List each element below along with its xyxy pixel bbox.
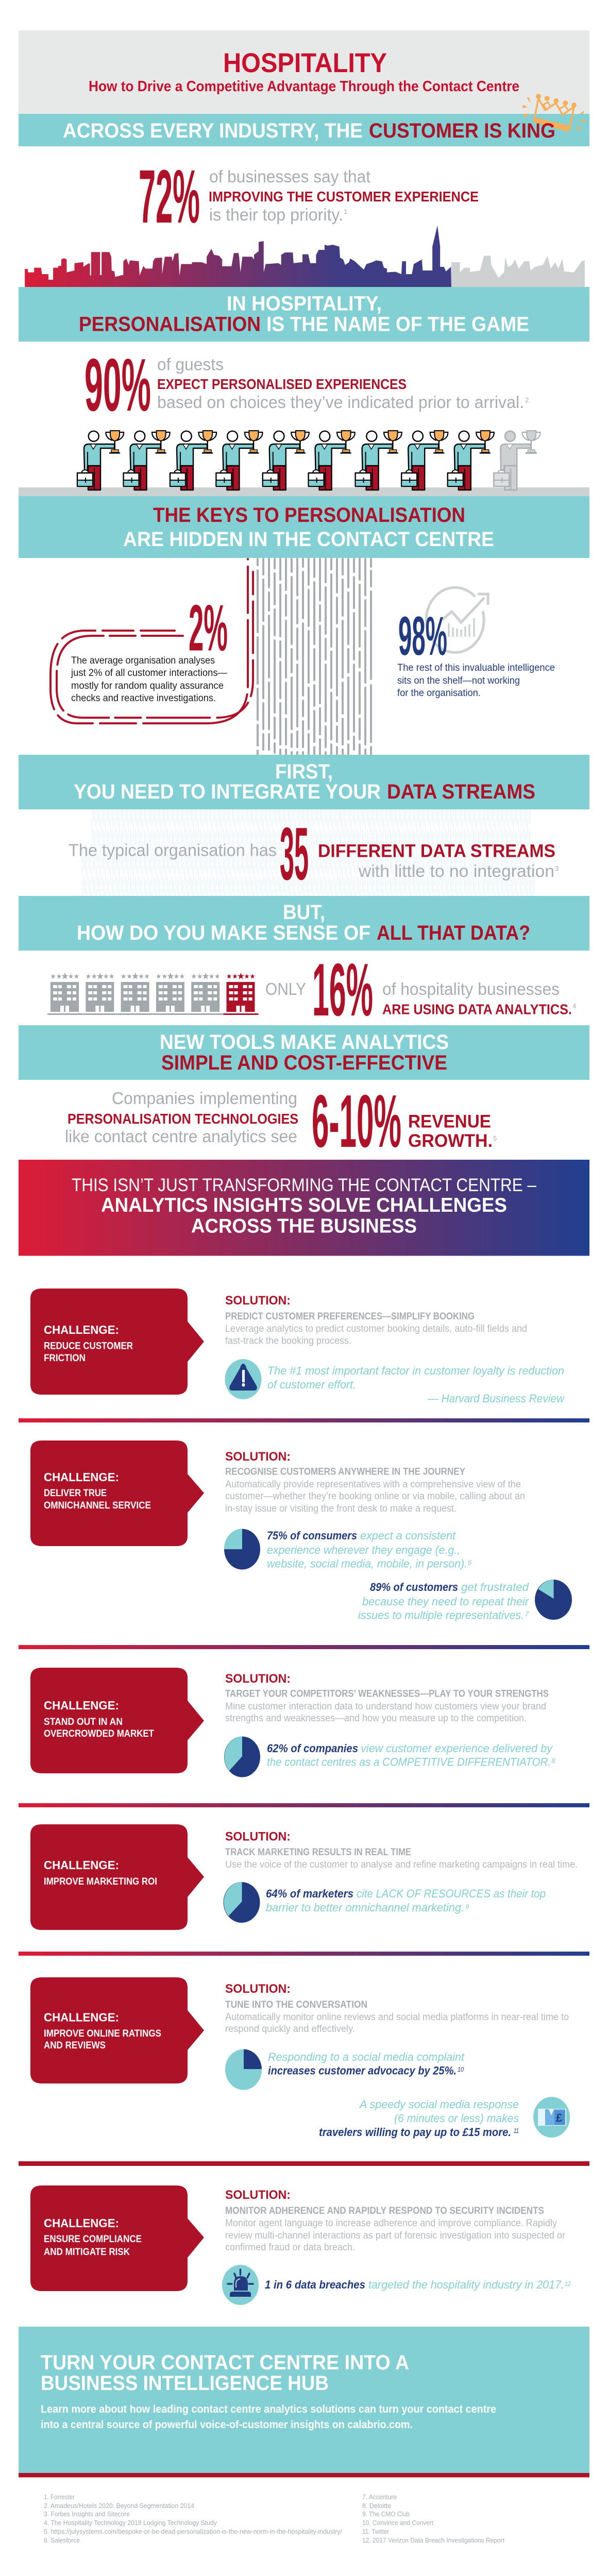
- pie chart: 62 percent: [224, 1736, 260, 1777]
- gradient banner: ANALYTICS INSIGHTS SOLVE CHALLENGES: [101, 1194, 507, 1216]
- panel: call to action: BUSINESS INTELLIGENCE HUB: [41, 2372, 329, 2395]
- stat: data breaches: 1 in 6 data breaches: [265, 2278, 365, 2291]
- quote: [267, 1364, 565, 1405]
- stat: 75 percent of consumers: expect a consistent: [360, 1529, 456, 1542]
- heading band: keys to personalisation: ARE HIDDEN IN THE CONTACT CENTRE: [123, 528, 494, 551]
- heading band: keys to personalisation: [19, 496, 589, 558]
- stat: 98 percent: sits on the shelf—not working: [397, 675, 520, 686]
- gradient banner: [19, 1160, 589, 1256]
- skyline illustration: [25, 225, 585, 288]
- stat: 64 percent of marketers: cite LACK OF RESOURCES as their top: [357, 1887, 546, 1900]
- gradient banner: THIS ISN’T JUST TRANSFORMING THE CONTACT CENTRE –: [72, 1175, 536, 1195]
- stat: 16 percent: ARE USING DATA ANALYTICS.: [382, 1002, 572, 1018]
- heading band: customer is king: [19, 94, 589, 146]
- stat: 6-10 percent revenue growth: REVENUE: [408, 1112, 491, 1132]
- stat: 89 percent of customers: because they need to repeat their: [362, 1595, 530, 1608]
- stat: 16 percent: [265, 948, 576, 1031]
- solution text: RECOGNISE CUSTOMERS ANYWHERE IN THE JOURNEY: [225, 1466, 465, 1478]
- challenge box: OMNICHANNEL SERVICE: [44, 1500, 151, 1511]
- solution text: Use the voice of the customer to analyse and refine marketing campaigns in real time.: [225, 1859, 578, 1870]
- solution text: customer—whether they’re booking online or via mobile, calling about an: [225, 1491, 525, 1502]
- stat: 75 percent of consumers: experience wherever they engage (e.g.,: [267, 1544, 460, 1556]
- callout: 2 percent: 2%: [189, 591, 228, 665]
- solution text: [225, 1450, 525, 1514]
- challenge box: CHALLENGE:: [44, 1323, 119, 1336]
- solution text: Automatically monitor online reviews and social media platforms in near-real time to: [225, 2012, 569, 2023]
- heading band: make sense of data: ALL THAT DATA?: [377, 922, 530, 944]
- challenge box: STAND OUT IN AN: [44, 1717, 123, 1727]
- stat: 72 percent: [139, 155, 479, 239]
- stat: 72 percent: IMPROVING THE CUSTOMER EXPERIENCE: [209, 189, 479, 205]
- stat: data breaches: [265, 2278, 571, 2291]
- icon: crown: [522, 94, 585, 132]
- panel: call to action: [19, 2327, 589, 2473]
- heading band: data streams: [19, 755, 589, 809]
- solution text: TRACK MARKETING RESULTS IN REAL TIME: [225, 1847, 411, 1858]
- challenge box: [30, 1977, 204, 2083]
- stat: 16 percent: 16%: [312, 948, 373, 1031]
- icon: banknote: [533, 2097, 570, 2138]
- stat: 75 percent of consumers: website, social media, mobile, in person).: [267, 1557, 467, 1570]
- solution text: fast-track the booking process.: [225, 1336, 351, 1347]
- solution text: MONITOR ADHERENCE AND RAPIDLY RESPOND TO SECURITY INCIDENTS: [225, 2206, 544, 2216]
- callout: 2 percent: mostly for random quality assurance: [71, 681, 224, 691]
- pie chart: 25 percent: [225, 2049, 262, 2090]
- solution text: in-stay issue or visiting the front desk to make a request.: [225, 1503, 457, 1514]
- stat: 6-10 percent revenue growth: 5: [493, 1134, 497, 1142]
- stat: 72 percent: 1: [344, 208, 347, 215]
- solution text: Mine customer interaction data to understand how customers view your brand: [225, 1701, 546, 1712]
- stat: 75 percent of consumers: 75% of consumers: [267, 1529, 357, 1542]
- callout: 2 percent: checks and reactive investigations.: [71, 693, 216, 704]
- solution text: TARGET YOUR COMPETITORS’ WEAKNESSES—PLAY TO YOUR STRENGTHS: [225, 1689, 549, 1700]
- pie chart: 64 percent: [224, 1882, 260, 1923]
- stat: 90 percent: 90%: [85, 343, 151, 427]
- footnotes: 3. Forbes Insights and Sitecore: [44, 2510, 130, 2518]
- stat: customer advocacy: Responding to a social media complaint: [268, 2050, 465, 2063]
- icon: growth chart in circle: [426, 587, 488, 652]
- challenge box: [30, 1440, 204, 1546]
- challenge box: AND REVIEWS: [44, 2040, 106, 2051]
- challenge box: FRICTION: [44, 1353, 86, 1364]
- heading band: keys to personalisation: THE KEYS TO PERSONALISATION: [153, 504, 465, 527]
- stat: 72 percent: is their top priority.: [209, 205, 343, 224]
- solution text: Monitor agent language to increase adherence and improve compliance. Rapidly: [225, 2218, 557, 2229]
- stat: 89 percent of customers: 89% of customers: [370, 1581, 458, 1594]
- figure: tenth person in grey: [494, 431, 540, 490]
- stat: customer advocacy: [268, 2050, 465, 2077]
- heading band: personalisation: IS THE NAME OF THE GAME: [266, 313, 529, 336]
- stat: 64 percent of marketers: 64% of marketers: [266, 1887, 353, 1900]
- footnotes: 9. The CMO Club: [362, 2510, 410, 2518]
- stat: 6-10 percent revenue growth: like contact centre analytics see: [65, 1127, 297, 1146]
- heading band: personalisation: [19, 287, 589, 342]
- heading band: data streams: DATA STREAMS: [387, 781, 535, 803]
- stat: speedy response: 11: [514, 2127, 519, 2134]
- stat: 75 percent of consumers: [267, 1529, 472, 1570]
- stat: 6-10 percent revenue growth: GROWTH.: [408, 1131, 493, 1151]
- footnotes: 4. The Hospitality Technology 2018 Lodging Technology Study: [44, 2519, 217, 2527]
- solution text: Leverage analytics to predict customer booking details, auto-fill fields and: [225, 1324, 527, 1334]
- footnotes: 6. Salesforce: [44, 2536, 80, 2544]
- solution text: [225, 1830, 578, 1870]
- stat: 90 percent: of guests: [157, 355, 224, 374]
- callout: 2 percent: The average organisation analyses: [71, 655, 215, 666]
- title: HOSPITALITY: [223, 48, 387, 78]
- footnotes: 12. 2017 Verizon Data Breach Investigations Report: [362, 2536, 504, 2544]
- panel: call to action: Learn more about how leading contact centre analytics solutions can turn your contact centre: [41, 2403, 496, 2415]
- panel: challenge 2: [30, 1440, 572, 1622]
- stat: 35 data streams: [69, 812, 559, 895]
- stat: customer advocacy: 10: [458, 2065, 464, 2073]
- stat: 35 data streams: 35: [280, 812, 309, 895]
- stat: 62 percent of companies: 62% of companies: [267, 1742, 358, 1755]
- stat: 16 percent: ONLY: [265, 979, 306, 998]
- callout: 2 percent: just 2% of all customer interactions—: [71, 668, 227, 679]
- stat: speedy response: A speedy social media response: [359, 2098, 519, 2111]
- stat: 6-10 percent revenue growth: 6-10%: [312, 1079, 401, 1163]
- stat: 90 percent: [85, 343, 529, 427]
- stat: 98 percent: The rest of this invaluable intelligence: [397, 663, 555, 673]
- heading band: new tools: [19, 1025, 589, 1080]
- stat: 35 data streams: The typical organisation has: [69, 840, 277, 859]
- stat: speedy response: travelers willing to pay up to £15 more.: [319, 2126, 511, 2139]
- stat: 35 data streams: with little to no integration: [358, 861, 554, 880]
- solution text: SOLUTION:: [225, 2188, 291, 2202]
- footnotes: [44, 2493, 504, 2544]
- panel: challenge 3: [30, 1668, 555, 1777]
- heading band: new tools: SIMPLE AND COST-EFFECTIVE: [161, 1052, 447, 1074]
- stat: 64 percent of marketers: barrier to better omnichannel marketing.: [266, 1901, 464, 1914]
- stat: 89 percent of customers: [358, 1581, 530, 1622]
- stat: 98 percent: 98%: [398, 605, 447, 667]
- dashed outline: [50, 559, 253, 723]
- figures: nine of ten people holding trophies: [77, 431, 540, 490]
- footnotes: 2. Amadeus/Hotels 2020: Beyond Segmentation 2014: [44, 2502, 194, 2510]
- heading band: make sense of data: BUT,: [283, 901, 325, 924]
- stat: data breaches: 12: [565, 2280, 571, 2287]
- quote: — Harvard Business Review: [427, 1392, 565, 1405]
- stat: speedy response: [319, 2098, 519, 2139]
- stat: 75 percent of consumers: 6: [468, 1558, 472, 1566]
- stat: 72 percent: 72%: [139, 155, 200, 239]
- solution text: [225, 1294, 527, 1347]
- footnotes: 5. https://julysystems.com/bespoke-or-be-dead-personalization-is-the-new-norm-in-the-hospitality-industry/: [44, 2528, 342, 2535]
- heading band: make sense of data: [19, 896, 589, 951]
- heading band: new tools: NEW TOOLS MAKE ANALYTICS: [160, 1031, 449, 1054]
- solution text: SOLUTION:: [225, 1450, 291, 1464]
- challenge box: OVERCROWDED MARKET: [44, 1728, 154, 1739]
- panel: call to action: TURN YOUR CONTACT CENTRE INTO A: [41, 2351, 409, 2374]
- solution text: PREDICT CUSTOMER PREFERENCES—SIMPLIFY BOOKING: [225, 1311, 475, 1322]
- footnotes: 7. Accenture: [362, 2493, 397, 2501]
- panel: challenge 5: [30, 1977, 570, 2139]
- challenge box: [30, 1824, 204, 1930]
- stat: 62 percent of companies: the contact centres as a COMPETITIVE DIFFERENTIATOR.: [267, 1756, 551, 1768]
- pie chart: 75 percent: [224, 1529, 260, 1569]
- stat: 6-10 percent revenue growth: PERSONALISATION TECHNOLOGIES: [67, 1111, 298, 1127]
- stat: data breaches: targeted the hospitality industry in 2017.: [368, 2278, 564, 2291]
- solution text: SOLUTION:: [225, 1982, 291, 1996]
- callout: 2 percent: [50, 559, 253, 723]
- data stripes column: [258, 559, 371, 755]
- solution text: review multi-channel interactions as part of forensic investigation into suspected or: [225, 2230, 566, 2241]
- stat: 62 percent of companies: view customer experience delivered by: [361, 1742, 553, 1755]
- footnotes: 8. Deloitte: [362, 2502, 391, 2510]
- pie chart: 89 percent: [535, 1580, 572, 1620]
- stat: 98 percent: for the organisation.: [397, 688, 481, 699]
- stat: 16 percent: 4: [572, 1002, 576, 1010]
- stat: 35 data streams: 3: [555, 865, 559, 872]
- stat: 64 percent of marketers: [266, 1887, 546, 1914]
- stat: 90 percent: 2: [525, 396, 529, 404]
- challenge box: CHALLENGE:: [44, 2011, 119, 2024]
- icon: siren: [222, 2265, 259, 2305]
- solution text: [225, 1672, 549, 1724]
- icons: six hotels, one highlighted: [47, 973, 259, 1015]
- stat: 90 percent: EXPECT PERSONALISED EXPERIENCES: [157, 376, 407, 392]
- stat: 89 percent of customers: get frustrated: [461, 1581, 529, 1594]
- stat: 6-10 percent revenue growth: Companies implementing: [112, 1089, 297, 1108]
- panel: call to action: into a central source of powerful voice-of-customer insights on calabrio.com.: [41, 2419, 413, 2431]
- challenge box: CHALLENGE:: [44, 1470, 119, 1484]
- challenge box: ENSURE COMPLIANCE: [44, 2234, 142, 2245]
- quote: The #1 most important factor in customer loyalty is reduction: [267, 1364, 564, 1377]
- solution text: TUNE INTO THE CONVERSATION: [225, 1999, 367, 2010]
- solution text: respond quickly and effectively.: [225, 2024, 355, 2035]
- panel: challenge 6: [30, 2185, 571, 2305]
- stat: 6-10 percent revenue growth: [65, 1079, 497, 1163]
- challenge box: CHALLENGE:: [44, 2216, 119, 2230]
- solution text: SOLUTION:: [225, 1294, 291, 1308]
- challenge box: IMPROVE ONLINE RATINGS: [44, 2028, 161, 2039]
- solution text: strengths and weaknesses—and how you measure up to the competition.: [225, 1713, 527, 1724]
- stat: 89 percent of customers: issues to multiple representatives.: [358, 1608, 524, 1622]
- icon: banknote: £: [556, 2111, 563, 2124]
- stat: customer advocacy: increases customer advocacy by 25%.: [268, 2064, 457, 2077]
- challenge box: [30, 1668, 204, 1773]
- panel: challenge 1: [30, 1289, 565, 1405]
- stat: 62 percent of companies: 8: [551, 1757, 555, 1765]
- challenge box: IMPROVE MARKETING ROI: [44, 1876, 157, 1887]
- stat: 72 percent: of businesses say that: [209, 167, 370, 186]
- footnotes: 11. Twitter: [362, 2528, 390, 2535]
- heading band: make sense of data: HOW DO YOU MAKE SENSE OF: [77, 922, 370, 944]
- solution text: confirmed fraud or data breach.: [225, 2242, 355, 2253]
- solution text: Automatically provide representatives with a comprehensive view of the: [225, 1479, 521, 1490]
- icon: warning: [225, 1359, 262, 1399]
- heading band: customer is king: ACROSS EVERY INDUSTRY, THE: [63, 120, 363, 142]
- footnotes: 10. Convince and Convert: [362, 2519, 433, 2527]
- heading band: data streams: FIRST,: [275, 760, 333, 783]
- stat: speedy response: (6 minutes or less) makes: [394, 2112, 519, 2125]
- panel: header: [19, 30, 589, 114]
- heading band: data streams: YOU NEED TO INTEGRATE YOUR: [74, 781, 381, 803]
- solution text: SOLUTION:: [225, 1672, 291, 1686]
- stat: 98 percent: [397, 605, 555, 699]
- challenge box: AND MITIGATE RISK: [44, 2247, 130, 2258]
- subtitle: How to Drive a Competitive Advantage Through the Contact Centre: [89, 78, 519, 95]
- solution text: SOLUTION:: [225, 1830, 291, 1843]
- panel: challenge 4: [30, 1824, 578, 1930]
- challenge box: CHALLENGE:: [44, 1858, 119, 1872]
- solution text: [225, 2188, 566, 2253]
- challenge box: [30, 1289, 204, 1395]
- stat: 90 percent: based on choices they’ve indicated prior to arrival.: [157, 393, 524, 412]
- stat: 89 percent of customers: 7: [525, 1610, 529, 1618]
- challenge box: REDUCE CUSTOMER: [44, 1341, 133, 1352]
- challenge box: [30, 2185, 204, 2291]
- heading band: personalisation: IN HOSPITALITY,: [227, 293, 382, 315]
- gradient banner: ACROSS THE BUSINESS: [191, 1215, 417, 1238]
- stat: 35 data streams: DIFFERENT DATA STREAMS: [318, 841, 555, 861]
- challenge box: CHALLENGE:: [44, 1699, 119, 1712]
- challenge box: DELIVER TRUE: [44, 1488, 107, 1499]
- quote: of customer effort.: [267, 1378, 356, 1391]
- floor strip: [19, 487, 589, 496]
- stat: 16 percent: of hospitality businesses: [382, 979, 560, 998]
- solution text: [225, 1982, 569, 2035]
- footnotes: 1. Forrester: [44, 2493, 75, 2501]
- stat: 62 percent of companies: [267, 1742, 555, 1768]
- heading band: personalisation: PERSONALISATION: [79, 313, 261, 336]
- stat: 64 percent of marketers: 9: [465, 1903, 469, 1910]
- heading band: customer is king: CUSTOMER IS KING: [369, 120, 555, 142]
